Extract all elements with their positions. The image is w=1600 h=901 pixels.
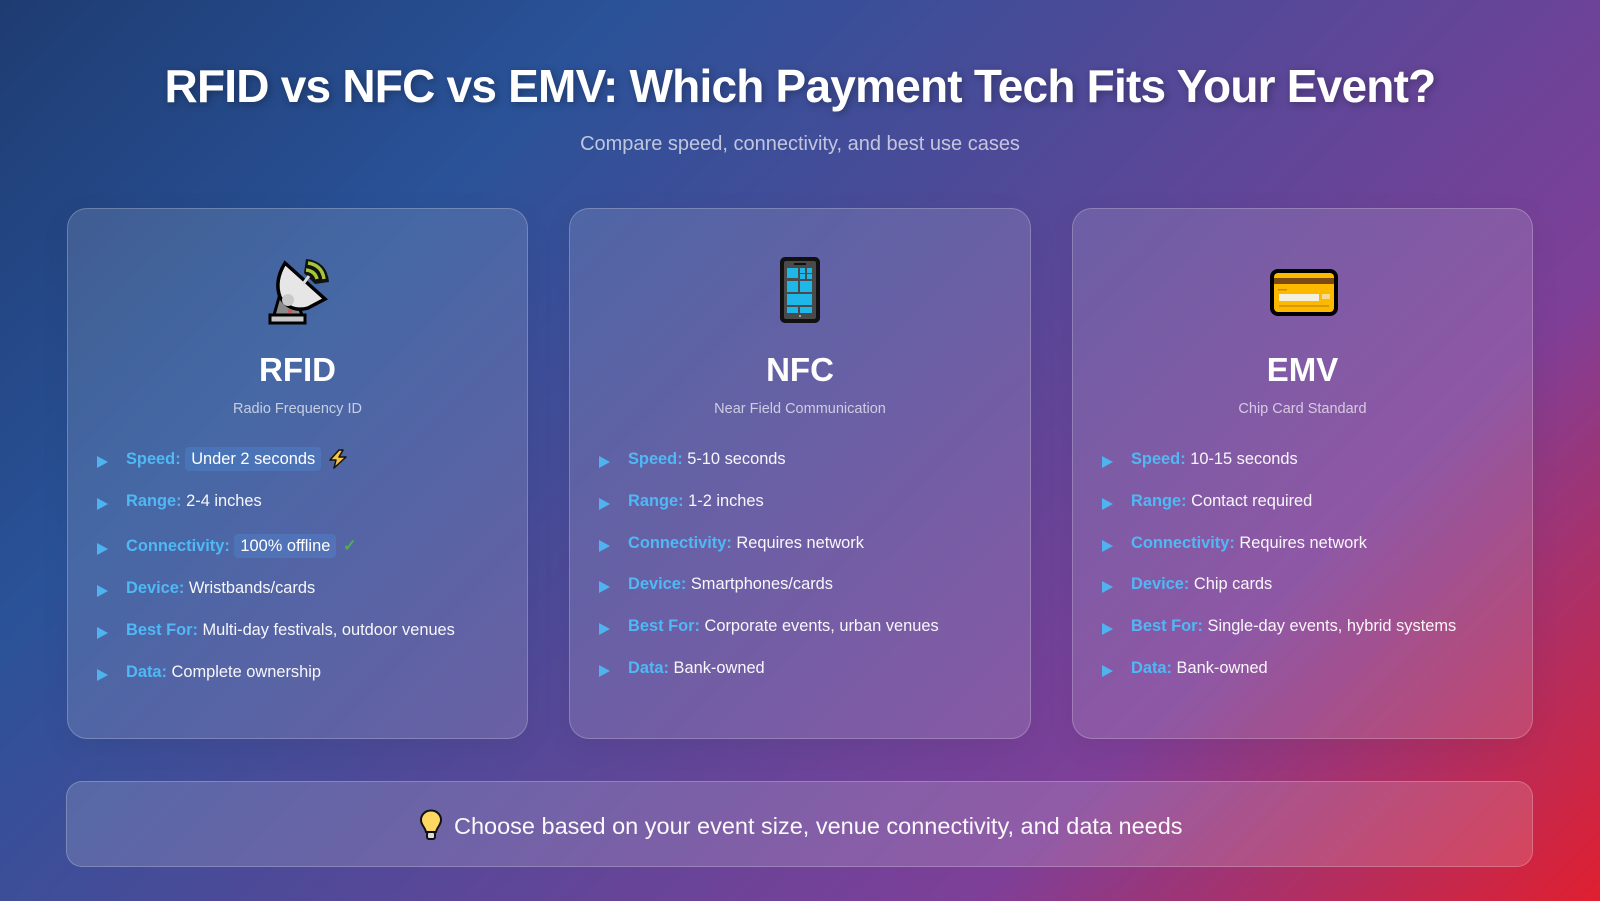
row: device: Device: Wristbands/cards <box>126 579 315 597</box>
row: speed: Speed: 10-15 seconds <box>1131 450 1298 468</box>
row: range: Range: 2-4 inches <box>126 492 262 510</box>
heading: EMV: EMV <box>1267 351 1338 388</box>
icon: smartphone <box>780 257 820 323</box>
row: device: Device: Chip cards <box>1131 575 1272 593</box>
row: best for: Best For: Corporate events, urban venues <box>628 617 939 635</box>
description: Chip Card Standard <box>1238 401 1367 417</box>
title: RFID vs NFC vs EMV: Which Payment Tech Fits Your Event? <box>165 60 1435 112</box>
row: data: Data: Bank-owned <box>628 659 765 677</box>
subtitle: Compare speed, connectivity, and best use cases <box>580 133 1020 155</box>
row: data: Data: Bank-owned <box>1131 659 1268 677</box>
description: Near Field Communication <box>714 401 886 417</box>
icon: credit card <box>1270 269 1338 316</box>
row: speed: Speed: 5-10 seconds <box>628 450 786 468</box>
panel: NFC <box>569 208 1031 739</box>
row: connectivity: Connectivity: Requires network <box>1131 534 1367 552</box>
row: best for: Best For: Multi-day festivals, outdoor venues <box>126 621 455 639</box>
row: connectivity <box>97 534 357 558</box>
row: best for: Best For: Single-day events, hybrid systems <box>1131 617 1456 635</box>
row: speed: Speed: Under 2 seconds <box>126 450 315 468</box>
icon: light bulb <box>420 810 442 840</box>
panel: EMV <box>1072 208 1533 739</box>
row: range: Range: Contact required <box>1131 492 1312 510</box>
icon: satellite dish <box>268 259 329 324</box>
panel: RFID <box>67 208 528 739</box>
heading: RFID: RFID <box>259 351 336 388</box>
row: connectivity: Connectivity: Requires network <box>628 534 864 552</box>
row: range: Range: 1-2 inches <box>628 492 764 510</box>
row: connectivity: Connectivity: 100% offline ✓ <box>126 537 357 555</box>
callout: recommendation <box>66 781 1533 867</box>
row: data: Data: Complete ownership <box>126 663 321 681</box>
row: speed <box>97 447 347 471</box>
icon: lightning bolt <box>329 449 347 469</box>
description: Radio Frequency ID <box>233 401 362 417</box>
callout text: Choose based on your event size, venue connectivity, and data needs <box>454 813 1183 839</box>
row: device: Device: Smartphones/cards <box>628 575 833 593</box>
heading: NFC: NFC <box>766 351 834 388</box>
